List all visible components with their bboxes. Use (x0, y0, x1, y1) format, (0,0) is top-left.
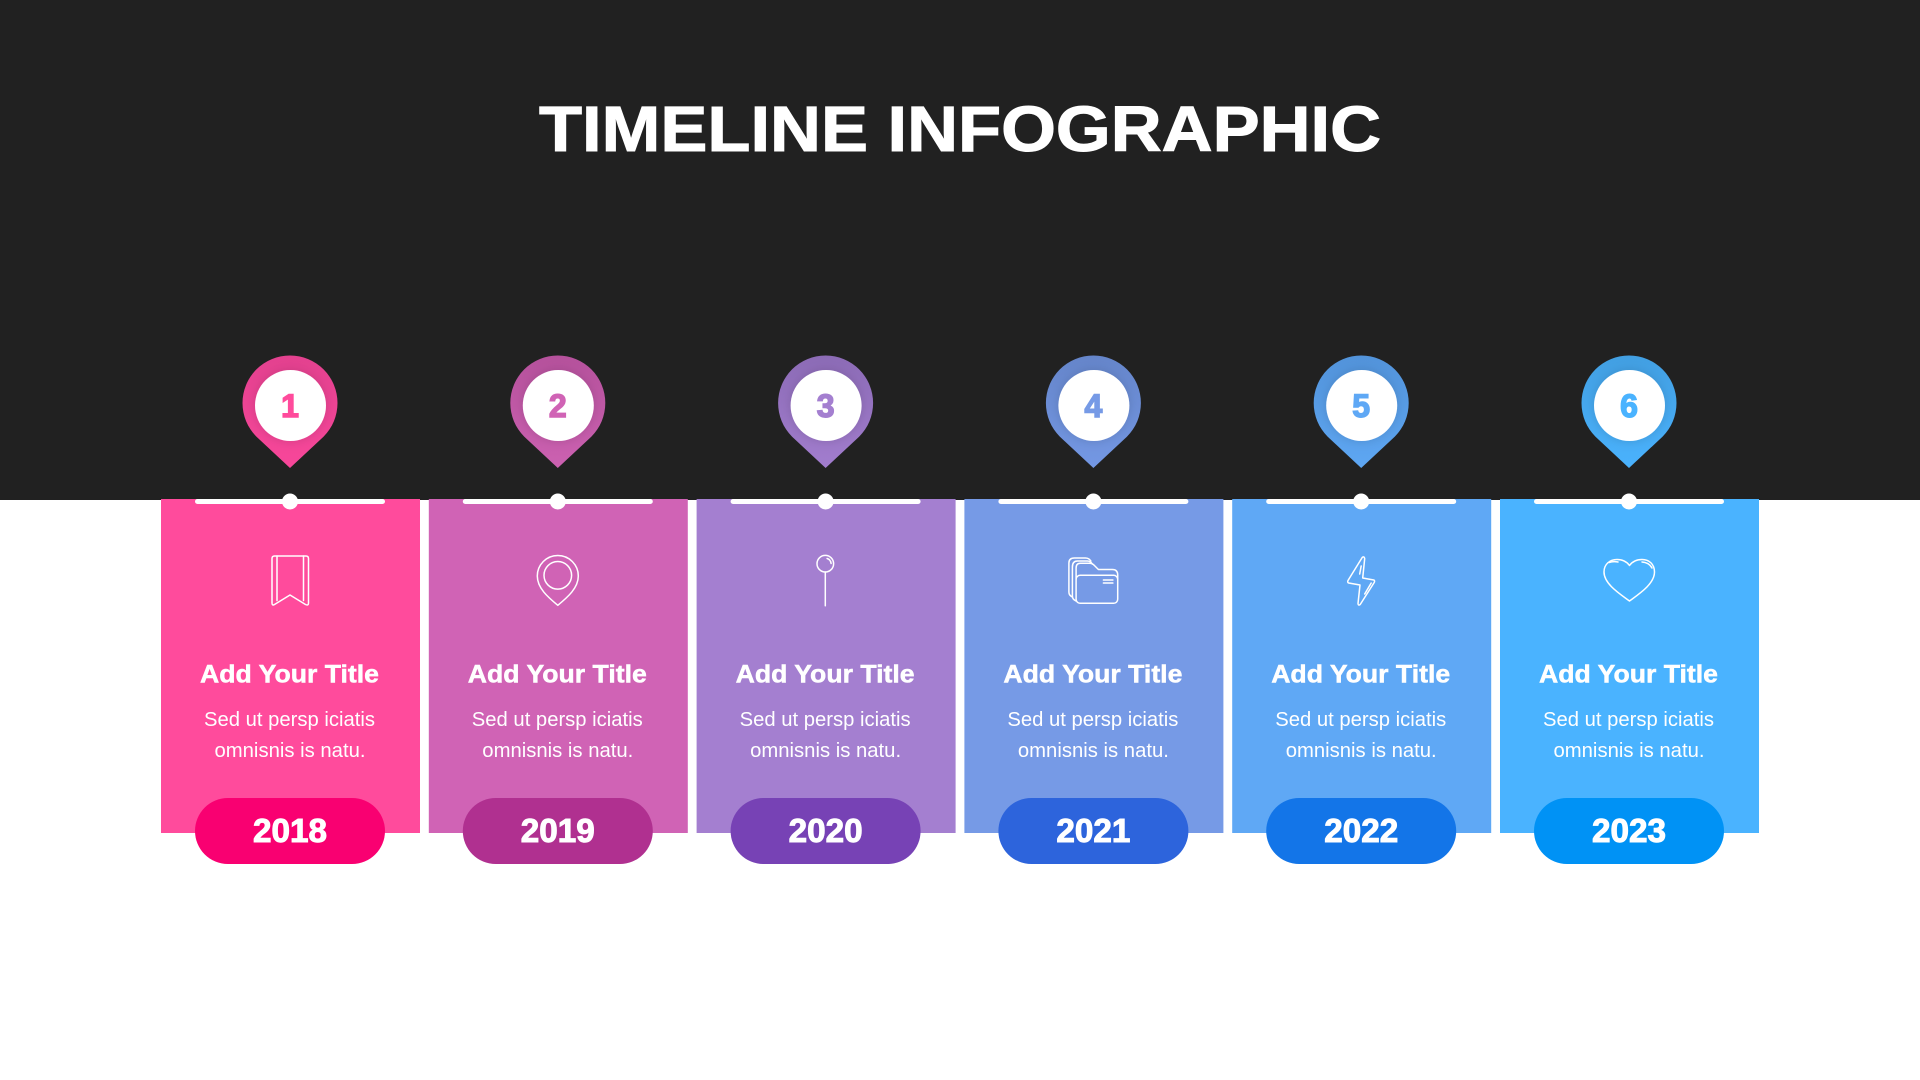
year pill 2 (463, 798, 653, 864)
location pin 1: 1 (281, 388, 299, 424)
card panel 5 (1232, 499, 1491, 833)
timeline marker 5 (1266, 494, 1456, 510)
location pin 6 (1582, 356, 1676, 468)
card description 6: omnisnis is natu. (1554, 740, 1704, 762)
card description 2: Sed ut persp iciatis (472, 709, 643, 731)
column 3: 2020 (697, 356, 956, 864)
year pill 3: 2020 (789, 812, 863, 849)
column 2: 2019 (429, 356, 688, 864)
card title 3: Add Your Title (736, 661, 915, 689)
column 6: 2023 (1500, 356, 1759, 864)
card description 6: Sed ut persp iciatis (1543, 709, 1714, 731)
location pin 2: 2 (549, 388, 567, 424)
icon: lollipop pin (817, 555, 834, 606)
column 1: 2018 (161, 356, 420, 864)
card description 1: omnisnis is natu. (214, 740, 366, 762)
dark header background (0, 0, 1920, 500)
card description 5 (1275, 709, 1446, 762)
card description 3 (740, 709, 911, 762)
location pin 4: 4 (1085, 388, 1103, 424)
location pin 1 (243, 356, 338, 468)
card panel 1 (161, 499, 420, 833)
column 5: 2022 (1232, 356, 1491, 864)
year pill 1: 2018 (253, 812, 327, 849)
icon: folders (1069, 558, 1118, 603)
card title 6: Add Your Title (1539, 661, 1718, 689)
card description 4 (1007, 709, 1178, 762)
card description 2 (472, 709, 643, 762)
card title 1: Add Your Title (200, 661, 379, 689)
column 4: 2021 (964, 356, 1223, 864)
year pill 5 (1266, 798, 1456, 864)
card panel 4 (964, 499, 1223, 833)
card title 4: Add Your Title (1003, 661, 1182, 689)
icon: heart (1604, 560, 1654, 601)
card description 3: Sed ut persp iciatis (740, 709, 911, 731)
card description 1 (204, 709, 375, 762)
location pin 6: 6 (1620, 388, 1638, 424)
timeline marker 1 (195, 494, 385, 510)
location pin 4 (1046, 356, 1141, 468)
location pin 2 (510, 356, 605, 468)
card description 2: omnisnis is natu. (482, 740, 633, 762)
timeline marker 3 (731, 494, 921, 510)
card description 6 (1543, 709, 1714, 762)
card panel 2 (429, 499, 688, 833)
card description 4: Sed ut persp iciatis (1007, 709, 1178, 731)
card description 3: omnisnis is natu. (750, 740, 901, 762)
card description 4: omnisnis is natu. (1018, 740, 1169, 762)
title: TIMELINE INFOGRAPHIC (539, 93, 1381, 165)
icon: lightning bolt (1348, 557, 1375, 605)
timeline marker 4 (998, 494, 1188, 510)
year pill 2: 2019 (521, 812, 595, 849)
card panel 6 (1500, 499, 1759, 833)
location pin 3: 3 (817, 388, 834, 424)
location pin 3 (778, 356, 873, 468)
card description 5: omnisnis is natu. (1286, 740, 1437, 762)
year pill 1 (195, 798, 385, 864)
location pin 5 (1314, 356, 1409, 468)
year pill 6 (1534, 798, 1724, 864)
year pill 4: 2021 (1056, 812, 1130, 849)
card description 1: Sed ut persp iciatis (204, 709, 375, 731)
card panel 3 (697, 499, 956, 833)
year pill 5: 2022 (1324, 812, 1398, 849)
card title 2: Add Your Title (468, 661, 647, 689)
year pill 4 (998, 798, 1188, 864)
timeline marker 2 (463, 494, 653, 510)
card title 5: Add Your Title (1271, 661, 1450, 689)
icon: map pin (537, 556, 578, 605)
card description 5: Sed ut persp iciatis (1275, 709, 1446, 731)
icon: bookmark (272, 556, 308, 605)
year pill 3 (731, 798, 921, 864)
location pin 5: 5 (1352, 388, 1370, 424)
timeline marker 6 (1534, 494, 1724, 510)
year pill 6: 2023 (1592, 812, 1666, 849)
